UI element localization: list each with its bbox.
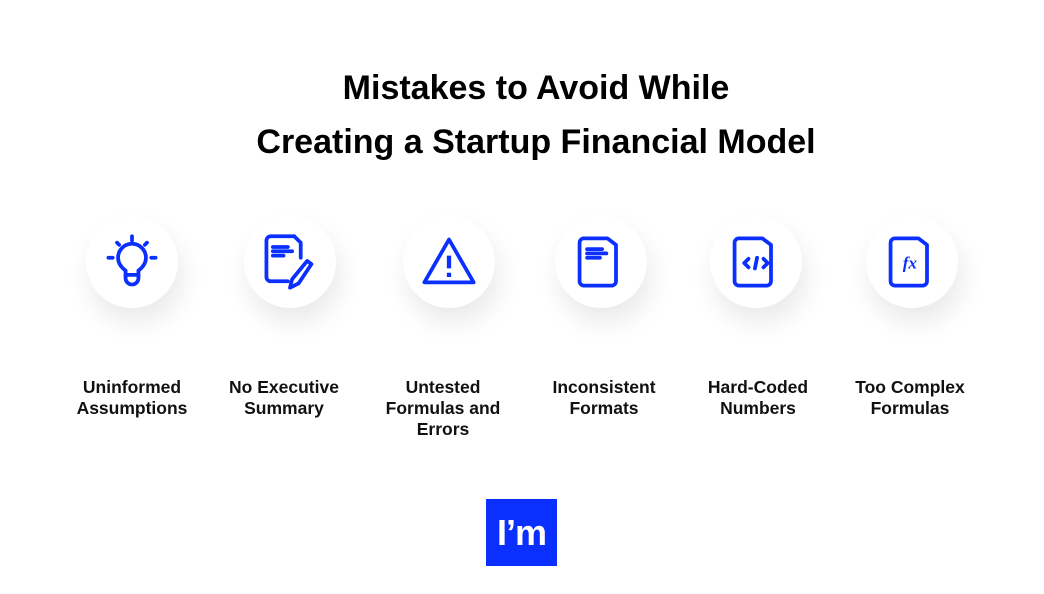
title: Mistakes to Avoid While <box>343 69 729 107</box>
label 2: No Executive <box>229 377 339 397</box>
label 2 <box>229 377 339 418</box>
label 1: Uninformed <box>83 377 181 397</box>
logo: I’m <box>497 512 546 553</box>
label 6: Formulas <box>871 398 949 418</box>
label 5: Numbers <box>720 398 796 418</box>
label 3 <box>386 377 500 439</box>
icon: warning <box>403 216 495 308</box>
label 6: Too Complex <box>855 377 965 397</box>
icon: lightbulb <box>86 216 178 308</box>
label 1 <box>77 377 187 418</box>
label 3: Formulas and <box>386 398 500 418</box>
title: Creating a Startup Financial Model <box>256 123 816 161</box>
label 6 <box>855 377 965 418</box>
label 3: Errors <box>417 419 469 439</box>
icon: document with pen <box>244 216 336 308</box>
label 5 <box>708 377 808 418</box>
label 1: Assumptions <box>77 398 187 418</box>
title <box>256 69 816 161</box>
icon: code document <box>710 216 802 308</box>
label 3: Untested <box>406 377 480 397</box>
label 5: Hard-Coded <box>708 377 808 397</box>
icon: document <box>555 216 647 308</box>
label 4: Inconsistent <box>552 377 656 397</box>
icon: fx document: fx <box>903 253 917 272</box>
label 4: Formats <box>569 398 639 418</box>
icon: fx document <box>866 216 958 308</box>
logo <box>486 499 557 566</box>
label 2: Summary <box>244 398 324 418</box>
label 4 <box>552 377 656 418</box>
